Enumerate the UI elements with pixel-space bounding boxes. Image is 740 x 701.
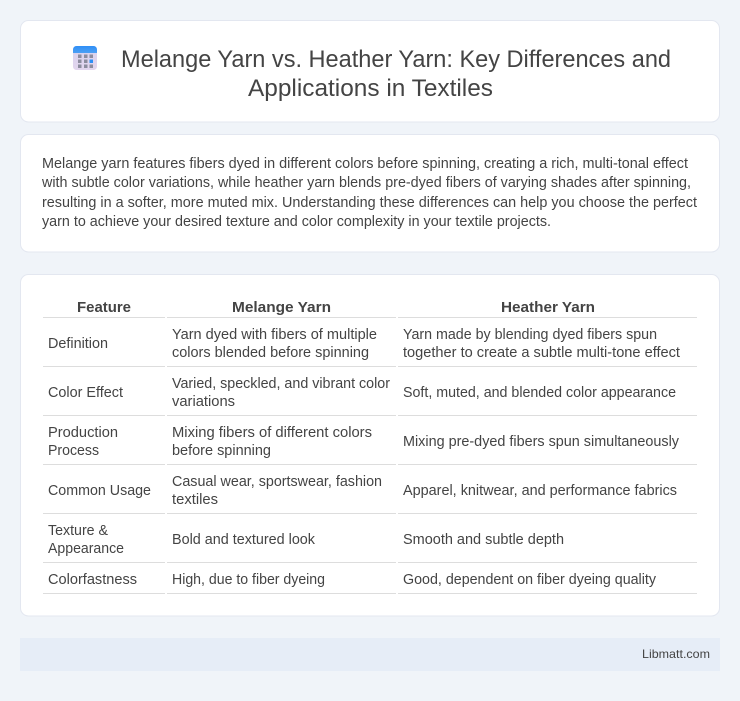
table row: production process: Process xyxy=(48,443,99,459)
footer: Libmatt.com xyxy=(642,647,710,661)
table row: texture and appearance: Appearance xyxy=(48,541,124,557)
table row: common usage: Apparel, knitwear, and performance fabrics xyxy=(403,483,677,499)
table row: definition: together to create a subtle multi-tone effect xyxy=(403,345,680,361)
table row: definition xyxy=(48,327,680,361)
table row: definition: Yarn dyed with fibers of multiple xyxy=(172,327,377,343)
table row: color effect: Color Effect xyxy=(48,385,123,401)
table header: Heather Yarn xyxy=(501,300,595,316)
table row: production process: before spinning xyxy=(172,443,271,459)
icon: calendar xyxy=(73,46,97,70)
table row: common usage: Casual wear, sportswear, fashion xyxy=(172,474,382,490)
table row: colorfastness: High, due to fiber dyeing xyxy=(172,572,325,588)
text block: introduction: with subtle color variations, while heather yarn blends pre-dyed fibers of varying shades after spinning, xyxy=(41,175,691,191)
table row: color effect xyxy=(48,376,676,410)
text block: introduction: yarn to achieve your desired texture and color complexity in your textile projects. xyxy=(42,214,551,230)
table row: definition: colors blended before spinning xyxy=(172,345,369,361)
table row: definition: Yarn made by blending dyed fibers spun xyxy=(403,327,657,343)
title xyxy=(121,46,671,102)
table row: common usage: textiles xyxy=(172,492,218,508)
table row: texture and appearance: Smooth and subtle depth xyxy=(403,532,564,548)
table row: colorfastness: Good, dependent on fiber dyeing quality xyxy=(403,572,657,588)
table header: Feature xyxy=(77,300,131,316)
table header: Melange Yarn xyxy=(232,300,331,316)
text block: introduction xyxy=(41,156,697,230)
footer xyxy=(20,638,720,671)
table row: color effect: variations xyxy=(172,394,235,410)
table row: production process: Production xyxy=(48,425,118,441)
table row: common usage xyxy=(48,474,677,508)
panel: introduction card xyxy=(20,134,720,252)
table row: color effect: Varied, speckled, and vibrant color xyxy=(172,376,390,392)
table row: common usage: Common Usage xyxy=(48,483,151,499)
table row: production process xyxy=(48,425,680,459)
text block: introduction: resulting in a softer, more muted mix. Understanding these differences can help you choose the perfect xyxy=(42,195,697,211)
table row: production process: Mixing fibers of different colors xyxy=(172,425,372,441)
table row: texture and appearance xyxy=(48,523,564,557)
panel: title card xyxy=(20,20,720,122)
table row: colorfastness: Colorfastness xyxy=(48,572,137,588)
table row: production process: Mixing pre-dyed fibers spun simultaneously xyxy=(403,434,680,450)
panel: comparison table card xyxy=(20,274,720,616)
table row: color effect: Soft, muted, and blended color appearance xyxy=(403,385,676,401)
table row: texture and appearance: Texture & xyxy=(48,523,108,539)
table row: definition: Definition xyxy=(48,336,108,352)
table header xyxy=(77,300,595,316)
title: Melange Yarn vs. Heather Yarn: Key Differences and xyxy=(121,46,671,73)
text block: introduction: Melange yarn features fibers dyed in different colors before spinning, creating a rich, multi-tonal effect xyxy=(42,156,688,172)
title: Applications in Textiles xyxy=(248,75,493,102)
table row: texture and appearance: Bold and textured look xyxy=(172,532,316,548)
table row: colorfastness xyxy=(48,572,657,588)
